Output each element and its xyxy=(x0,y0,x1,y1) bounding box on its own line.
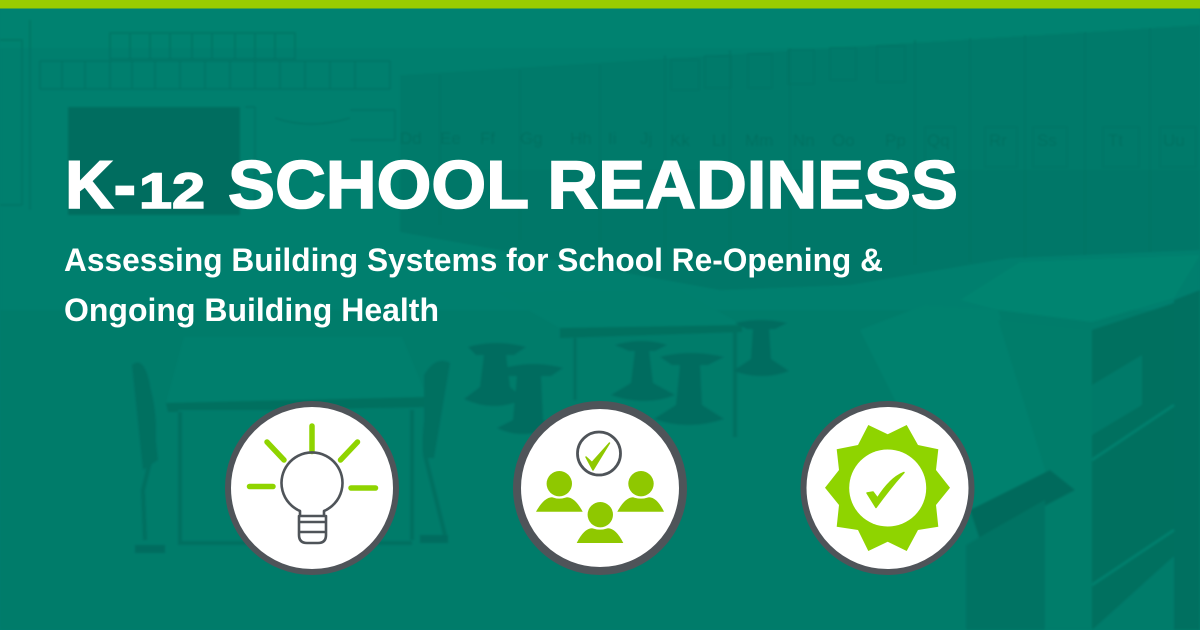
subtitle: Assessing Building Systems for School Re-Opening & xyxy=(64,242,883,278)
subtitle xyxy=(64,242,883,328)
alphabet cards: Rr xyxy=(989,131,1007,150)
icon: light bulb xyxy=(228,404,396,572)
alphabet cards: Kk xyxy=(670,131,690,150)
alphabet cards: Gg xyxy=(520,129,543,148)
alphabet cards xyxy=(400,129,1185,150)
stools xyxy=(464,320,789,434)
icon: people with checkmark xyxy=(517,405,683,571)
alphabet cards: Mm xyxy=(745,131,773,150)
alphabet cards: Pp xyxy=(885,131,906,150)
alphabet cards: Qq xyxy=(927,131,950,150)
alphabet cards: Ff xyxy=(480,129,495,148)
right cabinets xyxy=(860,305,1050,520)
title: K- xyxy=(65,147,136,223)
alphabet cards: Ll xyxy=(712,131,725,150)
title: SCHOOL READINESS xyxy=(228,147,958,223)
title: 12 xyxy=(139,163,205,219)
subtitle: Ongoing Building Health xyxy=(64,292,439,328)
alphabet cards: Jj xyxy=(640,129,652,148)
top accent bar xyxy=(0,0,1200,8)
alphabet cards: Oo xyxy=(832,131,855,150)
alphabet cards: Ss xyxy=(1037,131,1057,150)
alphabet cards: Ii xyxy=(608,129,616,148)
front table and chairs xyxy=(166,337,427,403)
alphabet cards: Hh xyxy=(570,129,592,148)
alphabet cards: Dd xyxy=(400,129,422,148)
center table xyxy=(497,290,742,328)
alphabet cards: Tt xyxy=(1108,131,1123,150)
alphabet cards: Uu xyxy=(1163,131,1185,150)
alphabet cards: Nn xyxy=(793,131,815,150)
icon: certification badge xyxy=(804,404,972,572)
chalkboard xyxy=(68,107,240,215)
alphabet cards: Ee xyxy=(440,129,461,148)
